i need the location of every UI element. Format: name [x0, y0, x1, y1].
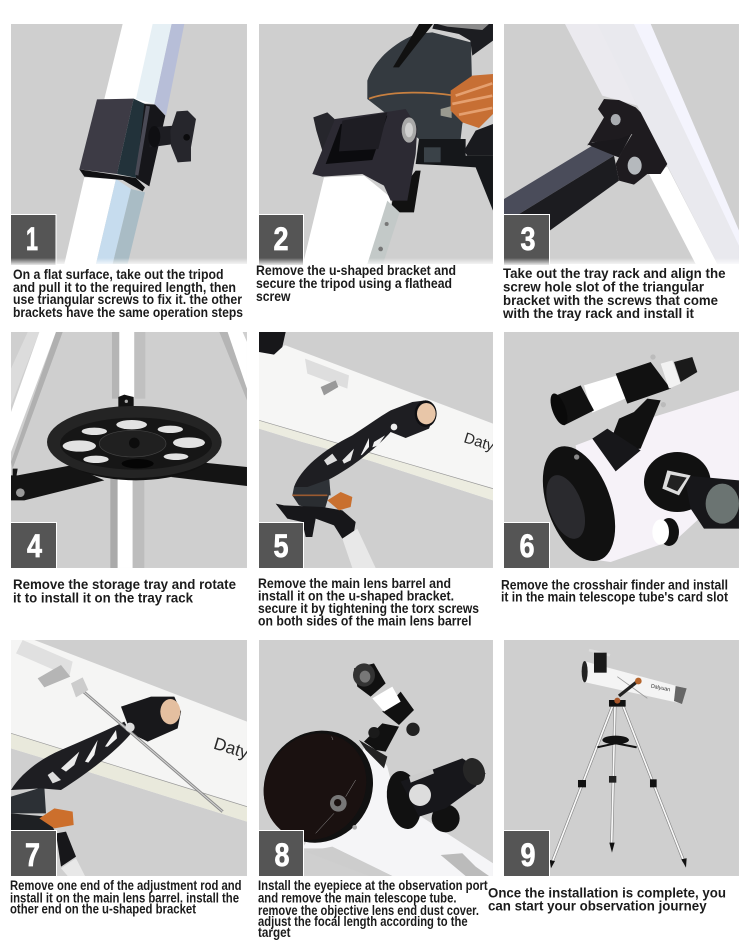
photo: adjustment rod on lens barrel [11, 640, 252, 876]
number badge 6: 6 [520, 528, 534, 564]
caption: step 8: and remove the main telescope tube. [258, 891, 456, 906]
caption: step 4: Remove the storage tray and rotate [13, 577, 236, 592]
caption: step 2: screw [256, 289, 291, 304]
caption: step 4 [13, 577, 236, 606]
caption: step 1: use triangular screws to fix it. the other [13, 292, 243, 307]
panel: step 9 [488, 640, 739, 914]
caption: step 8: adjust the focal length according to the [258, 914, 468, 929]
caption: step 3: with the tray rack and install it [502, 306, 694, 321]
caption: step 8: remove the objective lens end dust cover. [258, 903, 479, 918]
caption: step 5 [258, 576, 479, 629]
caption: step 7: other end on the u-shaped bracket [10, 902, 196, 917]
caption: step 8 [258, 878, 488, 940]
caption: step 6 [501, 577, 728, 605]
bottom fade [259, 258, 493, 266]
caption: step 5: Remove the main lens barrel and [258, 576, 451, 591]
photo: eyepiece and dust cover [242, 640, 493, 876]
caption: step 9: Once the installation is complete, you [488, 885, 726, 901]
panel: step 2 [256, 24, 493, 304]
bottom fade [11, 258, 247, 266]
caption: step 1: brackets have the same operation steps [13, 305, 243, 320]
caption: step 1: and pull it to the required length, then [13, 280, 236, 295]
caption: step 8: Install the eyepiece at the observation port [258, 878, 488, 893]
number badge 4: 4 [27, 528, 42, 564]
panel: step 1 [11, 24, 247, 320]
photo: main lens barrel on bracket: Daty [462, 430, 497, 455]
caption: step 5: install it on the u-shaped bracket. [258, 589, 454, 604]
number badge 7 [11, 830, 57, 876]
number badge 8: 8 [274, 837, 290, 873]
caption: step 3 [502, 266, 726, 321]
caption: step 6: it in the main telescope tube's card slot [501, 590, 728, 605]
photo: crosshair finder on telescope tube [504, 332, 739, 571]
photo: complete telescope on tripod [504, 640, 739, 876]
photo: complete telescope on tripod: Dalyuan [650, 683, 671, 693]
bottom fade [504, 258, 739, 266]
caption: step 2: Remove the u-shaped bracket and [256, 263, 456, 278]
number badge 1: 1 [26, 221, 38, 257]
caption: step 4: it to install it on the tray rack [13, 590, 193, 606]
number badge 8 [259, 830, 304, 876]
caption: step 7: Remove one end of the adjustment rod and [10, 878, 242, 893]
caption: step 3: bracket with the screws that come [503, 293, 718, 308]
caption: step 2: secure the tripod using a flathead [256, 276, 452, 291]
panel: step 5 [258, 332, 497, 629]
number badge 9: 9 [520, 837, 536, 873]
photo: adjustment rod on lens barrel: Daty [211, 733, 252, 763]
caption: step 9: can start your observation journey [488, 898, 707, 914]
panel: step 8 [242, 640, 493, 940]
caption: step 2 [256, 263, 456, 304]
number badge 3 [504, 214, 550, 265]
caption: step 3: Take out the tray rack and align the [503, 266, 726, 281]
caption: step 1 [13, 267, 243, 320]
caption: step 6: Remove the crosshair finder and install [501, 577, 728, 592]
caption: step 3: screw hole slot of the triangular [503, 280, 705, 294]
photo: tripod leg with clamp [11, 24, 247, 264]
number badge 3: 3 [520, 221, 536, 257]
number badge 7: 7 [25, 837, 40, 873]
number badge 1 [11, 214, 56, 265]
number badge 4 [11, 522, 57, 568]
caption: step 7: install it on the main lens barrel. install the [10, 891, 239, 906]
panel: step 6 [501, 332, 739, 605]
number badge 5: 5 [274, 528, 288, 564]
number badge 9 [504, 830, 550, 876]
caption: step 5: secure it by tightening the torx screws [258, 601, 479, 616]
caption: step 7 [10, 878, 242, 917]
number badge 2: 2 [274, 221, 288, 257]
panel: step 7 [10, 640, 252, 917]
photo: main lens barrel on bracket [259, 332, 497, 568]
number badge 2 [259, 214, 304, 265]
caption: step 8: target [258, 925, 291, 940]
number badge 6 [504, 522, 550, 568]
caption: step 9 [488, 885, 726, 914]
caption: step 5: on both sides of the main lens barrel [258, 614, 472, 629]
number badge 5 [259, 522, 304, 568]
photo: storage tray on rack [11, 332, 247, 568]
panel: step 4 [11, 332, 247, 606]
panel: step 3 [502, 24, 739, 321]
photo: u-shaped bracket and mount head [259, 24, 493, 264]
photo: tray rack bracket on leg [504, 24, 739, 264]
caption: step 1: On a flat surface, take out the tripod [13, 267, 224, 282]
